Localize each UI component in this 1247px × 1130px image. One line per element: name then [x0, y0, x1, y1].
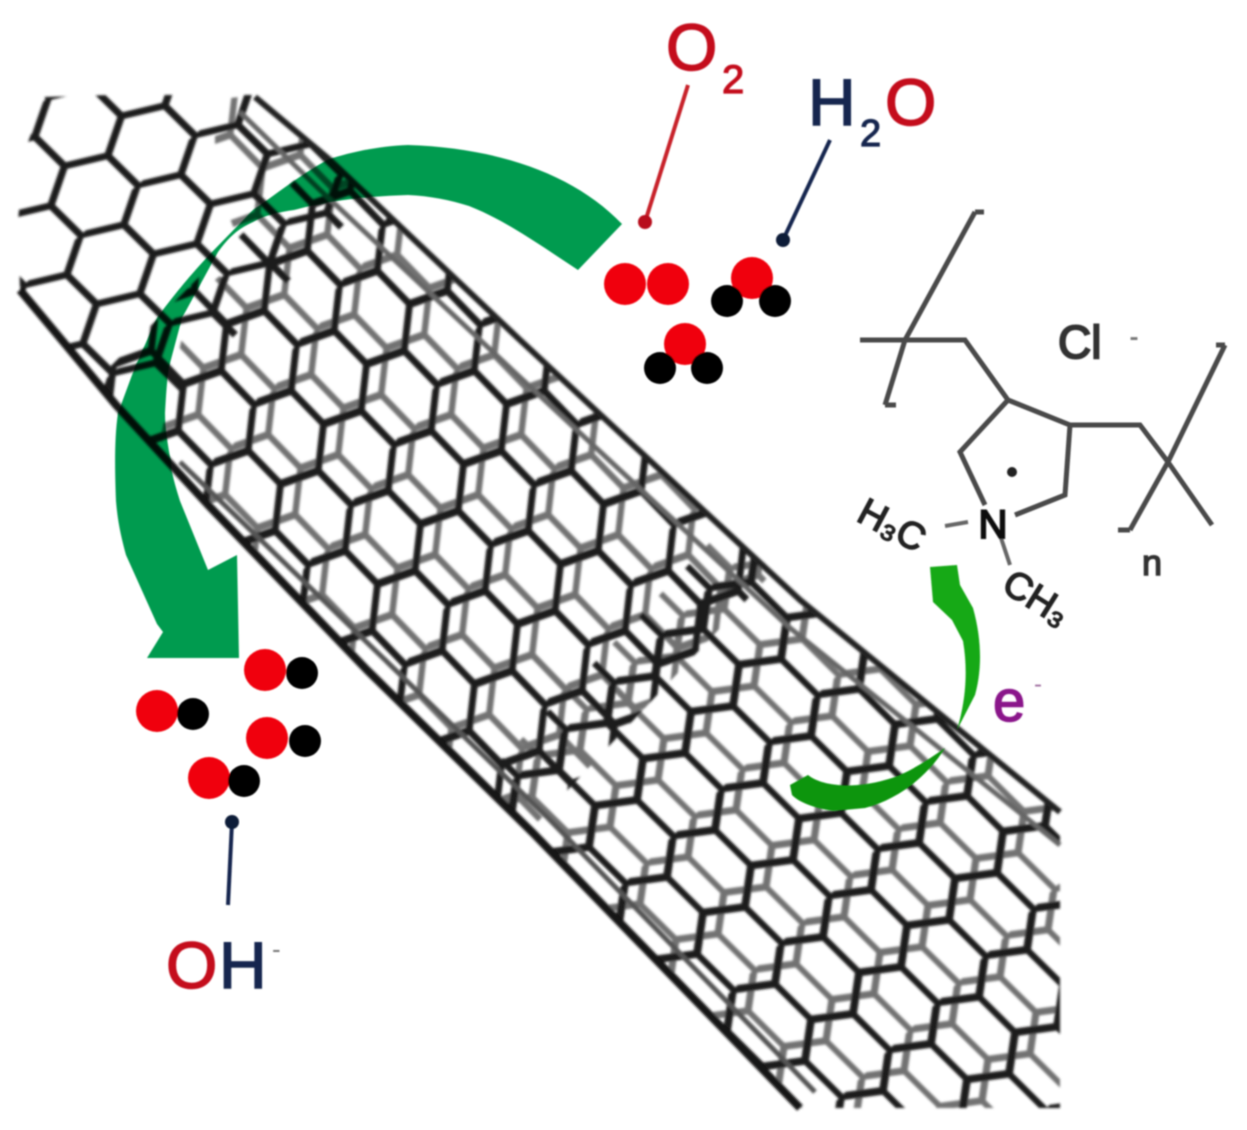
- arrow: H2O pointer: [776, 140, 830, 247]
- chemical structure: polymer: H₃C: [851, 491, 933, 561]
- label: O2: O: [666, 10, 717, 84]
- chemical structure: polymer: CH₃: [995, 562, 1077, 635]
- molecule: O2: [604, 263, 689, 305]
- arrow: O2 pointer: [638, 85, 688, 229]
- arrow: electron transfer: [790, 565, 980, 811]
- label: OH-: H: [219, 928, 267, 1002]
- arrow: large teal curved arrow: [115, 145, 622, 658]
- chemical structure: polymer: Cl: [1058, 316, 1101, 368]
- chemical structure: polymer: N: [979, 503, 1007, 547]
- label: electron: e: [993, 669, 1025, 734]
- label: OH-: [166, 928, 281, 1002]
- chemical structure: polymer: [851, 212, 1225, 635]
- molecules: hydroxide ions: [136, 649, 321, 799]
- molecule: H2O lower: [644, 323, 723, 384]
- label: H2O: H: [808, 65, 856, 139]
- label: H2O: 2: [860, 113, 881, 155]
- label: H2O: O: [885, 65, 936, 139]
- label: OH-: -: [272, 934, 281, 964]
- molecule: H2O upper: [711, 257, 791, 317]
- label: O2: 2: [722, 58, 744, 102]
- label: electron: -: [1034, 671, 1042, 698]
- label: OH-: O: [166, 928, 217, 1002]
- label: H2O: [808, 65, 936, 155]
- label: electron: [993, 669, 1042, 734]
- chemical structure: polymer: -: [1130, 324, 1138, 351]
- chemical structure: polymer: n: [1142, 542, 1162, 583]
- arrow: OH pointer: [225, 815, 239, 905]
- label: O2: [666, 10, 744, 102]
